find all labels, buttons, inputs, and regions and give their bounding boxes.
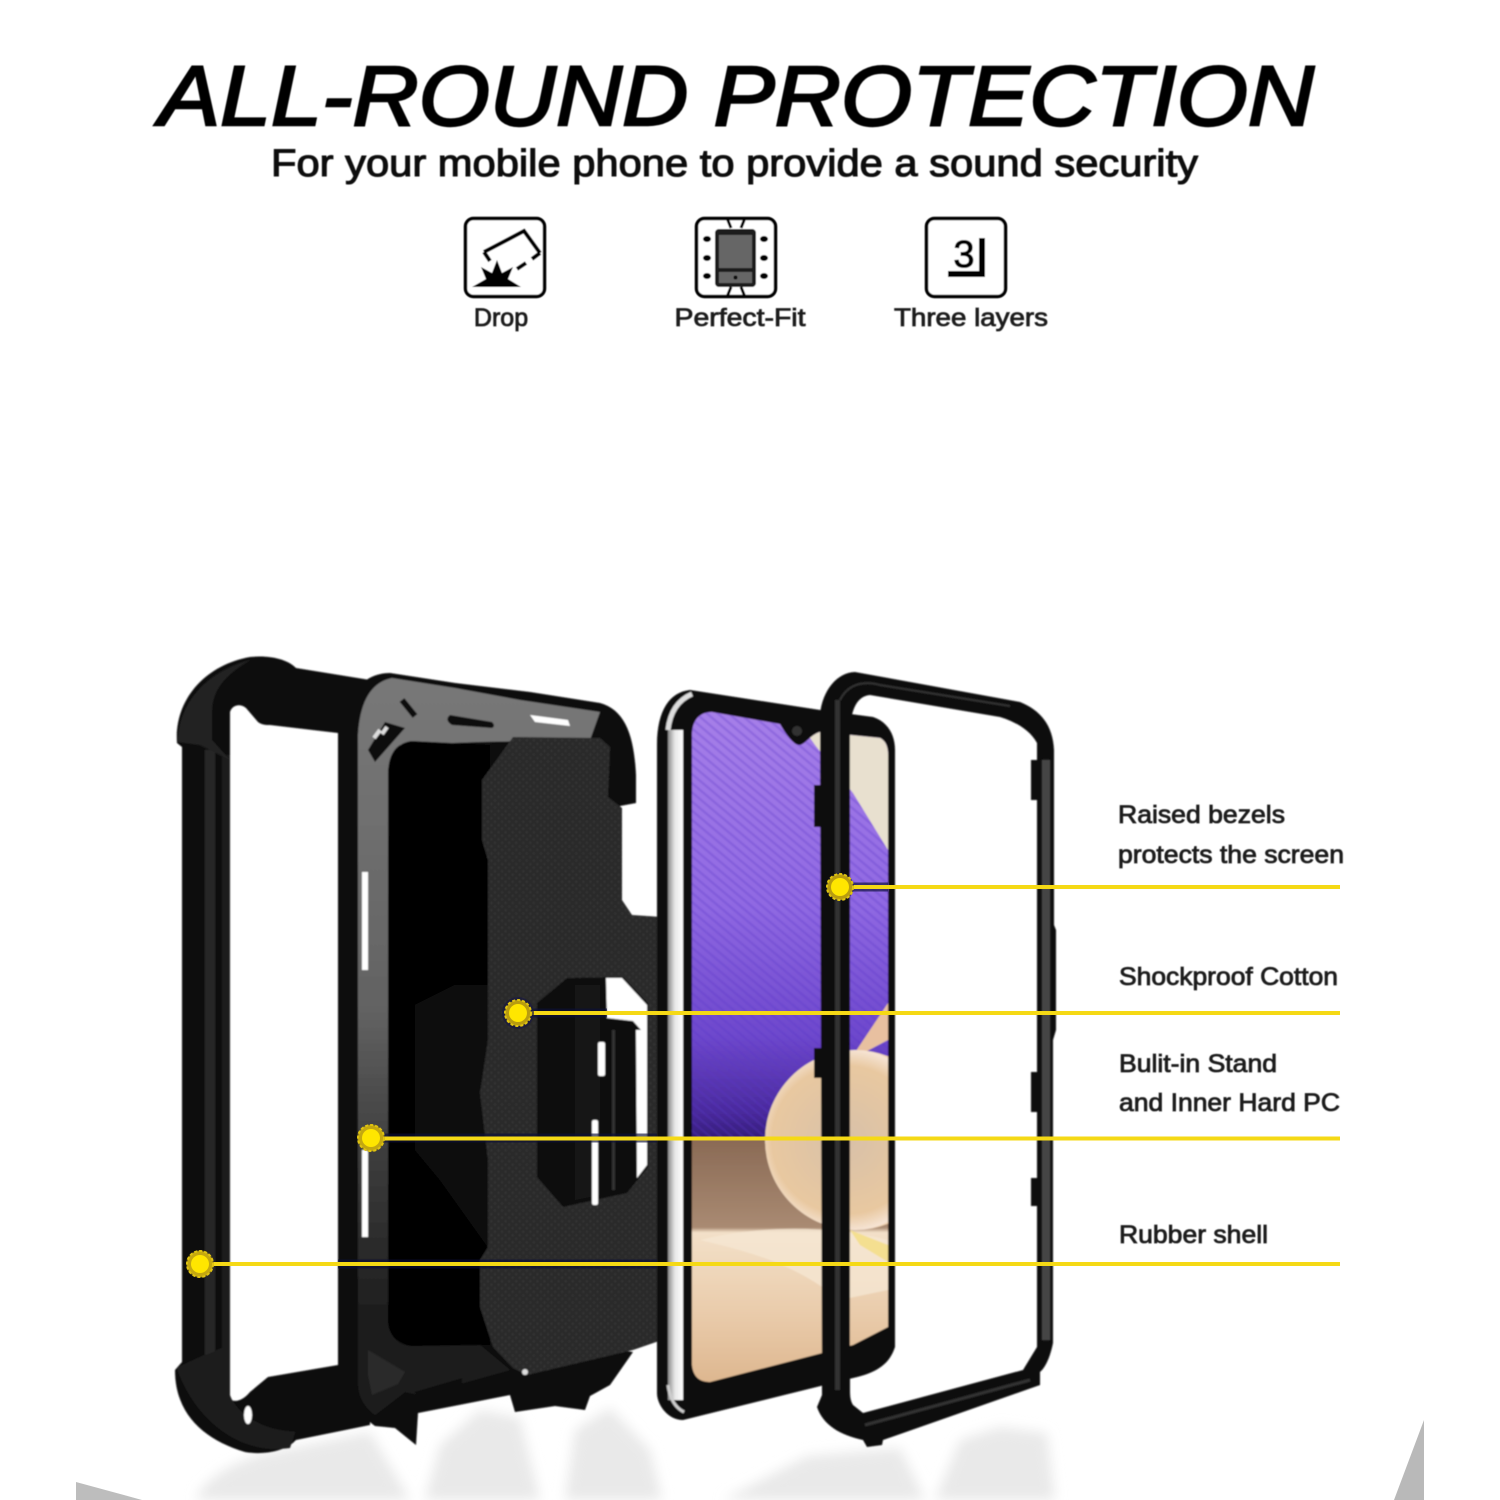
title: ALL-ROUND PROTECTION bbox=[154, 49, 1314, 143]
callout line: shockproof cotton bbox=[528, 1011, 1340, 1015]
callout label: rubber shell: Rubber shell bbox=[1119, 1221, 1268, 1249]
subtitle: For your mobile phone to provide a sound security bbox=[271, 143, 1198, 185]
callout label: built-in stand bbox=[1119, 1050, 1340, 1117]
phone screen wallpaper bbox=[690, 710, 890, 1384]
callout label: built-in stand: Bulit-in Stand bbox=[1119, 1050, 1277, 1078]
callout line: raised bezels bbox=[850, 885, 1340, 889]
corner wedge left bbox=[76, 1482, 142, 1500]
icon: perfect fit bbox=[696, 218, 776, 297]
back case bbox=[338, 673, 636, 1445]
side button cutouts bbox=[362, 872, 368, 970]
callout label: raised bezels: Raised bezels bbox=[1118, 801, 1285, 829]
label: drop: Drop bbox=[474, 304, 528, 332]
icon: three layers: 3 bbox=[953, 234, 975, 276]
callout label: built-in stand: and Inner Hard PC bbox=[1119, 1089, 1340, 1117]
callout label: raised bezels bbox=[1118, 801, 1344, 869]
callout line: built-in stand bbox=[382, 1136, 1340, 1140]
grey inner rim bbox=[358, 678, 600, 1415]
dark halo on lines bbox=[338, 887, 888, 1264]
phone bbox=[656, 689, 896, 1422]
label: perfect fit: Perfect-Fit bbox=[674, 304, 806, 332]
callout marker: shockproof cotton bbox=[502, 997, 534, 1029]
callout lines bbox=[212, 885, 1340, 1266]
callout label: shockproof cotton: Shockproof Cotton bbox=[1119, 963, 1338, 991]
raised bezel front frame bbox=[814, 672, 1056, 1447]
floor shadow bbox=[196, 1408, 1055, 1500]
camera notch dot bbox=[792, 726, 802, 736]
white see-through area bbox=[606, 978, 647, 1178]
callout marker: built-in stand bbox=[357, 1124, 385, 1152]
feature icons row bbox=[466, 218, 1048, 332]
callout marker: raised bezels bbox=[826, 873, 854, 901]
rim slots and vents bbox=[447, 715, 494, 728]
rubber shell frame bbox=[175, 657, 370, 1453]
label: three layers: Three layers bbox=[894, 304, 1048, 332]
icon: three layers bbox=[926, 218, 1006, 296]
corner wedge right bbox=[1394, 1420, 1424, 1500]
callout label: raised bezels: protects the screen bbox=[1118, 841, 1344, 869]
callout marker: rubber shell bbox=[186, 1250, 214, 1278]
clip opening bbox=[537, 977, 648, 1207]
belt clip bbox=[480, 737, 662, 1375]
callout line: rubber shell bbox=[212, 1262, 1340, 1266]
inner cavity bbox=[388, 741, 490, 1346]
icon: drop bbox=[466, 218, 544, 296]
exploded phone case illustration bbox=[175, 657, 1056, 1453]
